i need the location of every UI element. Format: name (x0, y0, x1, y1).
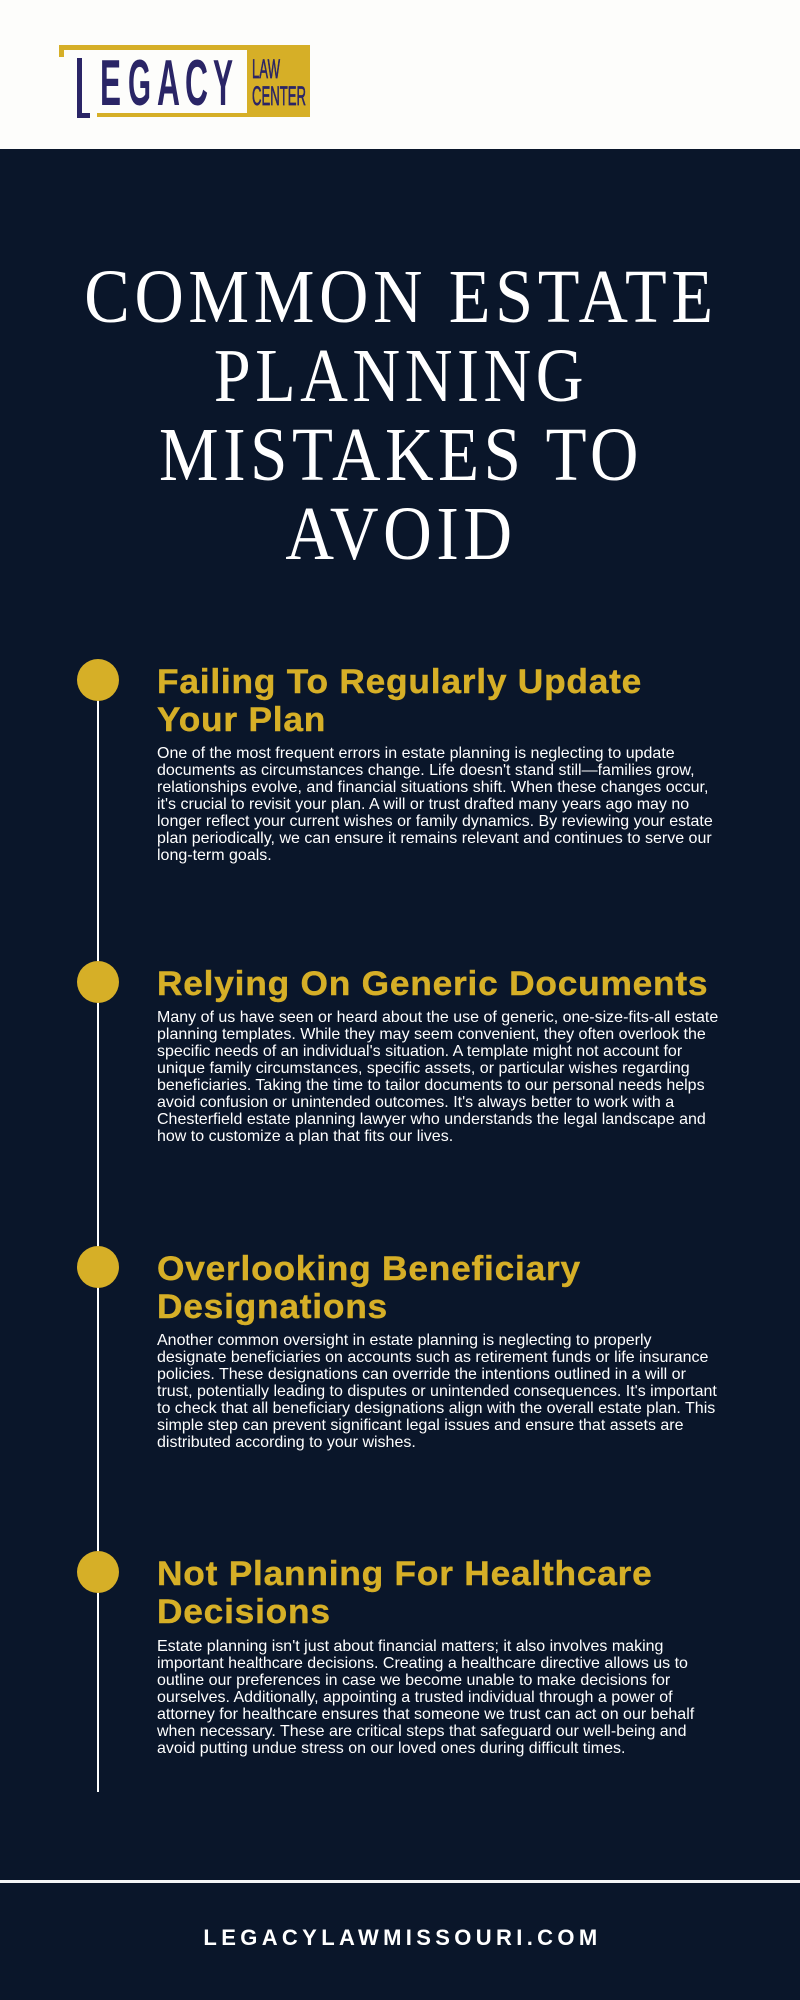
text 4: outline our preferences in case we become unable to make decisions for (157, 1672, 670, 1689)
timeline marker 2 (77, 961, 119, 1003)
timeline marker 4 (77, 1551, 119, 1593)
timeline marker 1 (77, 659, 119, 701)
text 4: attorney for healthcare ensures that someone we trust can act on our behalf (157, 1706, 694, 1723)
text 1: longer reflect your current wishes or family dynamics. By reviewing your estate (157, 813, 713, 830)
text 2: Chesterfield estate planning lawyer who understands the legal landscape and (157, 1111, 706, 1128)
logo: Legacy Law Center: G (128, 46, 151, 119)
text 2: how to customize a plan that fits our lives. (157, 1128, 453, 1145)
text 1: relationships evolve, and financial situations shift. When these changes occur, (157, 779, 708, 796)
text 1: plan periodically, we can ensure it remains relevant and continues to serve our (157, 830, 712, 847)
logo: Legacy Law Center: C (185, 46, 208, 119)
text 4: Estate planning isn't just about financial matters; it also involves making (157, 1638, 663, 1655)
heading 1: Failing To Regularly Update (157, 663, 642, 701)
heading 4 (157, 1555, 653, 1631)
footer website: LEGACYLAWMISSOURI.COM (203, 1925, 602, 1950)
title: AVOID (285, 492, 517, 576)
title: PLANNING (214, 334, 588, 418)
text 2: planning templates. While they may seem convenient, they often overlook the (157, 1026, 706, 1043)
text 3 (157, 1332, 717, 1451)
heading 2: Relying On Generic Documents (157, 965, 708, 1003)
heading 3: Designations (157, 1288, 388, 1326)
heading 3 (157, 1250, 581, 1326)
logo: Legacy Law Center: LAW (252, 54, 280, 84)
text 4 (157, 1638, 694, 1757)
title: MISTAKES TO (159, 413, 643, 497)
text 2: specific needs of an individual's situation. A template might not account for (157, 1043, 682, 1060)
heading 3: Overlooking Beneficiary (157, 1250, 581, 1288)
logo: Legacy Law Center: A (157, 46, 180, 119)
text 3: policies. These designations can override the intentions outlined in a will or (157, 1366, 686, 1383)
title (84, 255, 718, 576)
text 2 (157, 1009, 718, 1145)
text 1 (157, 745, 713, 864)
text 2: beneficiaries. Taking the time to tailor documents to our personal needs helps (157, 1077, 705, 1094)
text 3: distributed according to your wishes. (157, 1434, 416, 1451)
text 2: Many of us have seen or heard about the use of generic, one-size-fits-all estate (157, 1009, 718, 1026)
text 1: it's crucial to revisit your plan. A will or trust drafted many years ago may no (157, 796, 689, 813)
text 1: One of the most frequent errors in estate planning is neglecting to update (157, 745, 675, 762)
text 4: avoid putting undue stress on our loved ones during difficult times. (157, 1740, 625, 1757)
heading 4: Decisions (157, 1593, 331, 1631)
logo: Legacy Law Center: Y (213, 46, 233, 119)
text 3: simple step can prevent significant legal issues and ensure that assets are (157, 1417, 684, 1434)
footer divider (0, 1880, 800, 1883)
text 4: ourselves. Additionally, appointing a trusted individual through a power of (157, 1689, 673, 1706)
logo: Legacy Law Center (59, 45, 310, 119)
logo: Legacy Law Center: E (100, 46, 121, 119)
text 3: trust, potentially leading to disputes or unintended consequences. It's important (157, 1383, 717, 1400)
text 4: when necessary. These are critical steps that safeguard our well-being and (157, 1723, 686, 1740)
title: COMMON ESTATE (84, 255, 718, 339)
text 3: to check that all beneficiary designations align with the overall estate plan. This (157, 1400, 715, 1417)
text 1: documents as circumstances change. Life doesn't stand still—families grow, (157, 762, 695, 779)
header band with logo (0, 0, 800, 149)
timeline marker 3 (77, 1246, 119, 1288)
heading 4: Not Planning For Healthcare (157, 1555, 653, 1593)
text 1: long-term goals. (157, 847, 272, 864)
timeline line (97, 680, 99, 1792)
text 2: unique family circumstances, specific assets, or particular wishes regarding (157, 1060, 690, 1077)
heading 1 (157, 663, 642, 739)
text 3: designate beneficiaries on accounts such as retirement funds or life insurance (157, 1349, 708, 1366)
text 3: Another common oversight in estate planning is neglecting to properly (157, 1332, 652, 1349)
text 2: avoid confusion or unintended outcomes. It's always better to work with a (157, 1094, 674, 1111)
heading 1: Your Plan (157, 701, 326, 739)
text 4: important healthcare decisions. Creating a healthcare directive allows us to (157, 1655, 688, 1672)
